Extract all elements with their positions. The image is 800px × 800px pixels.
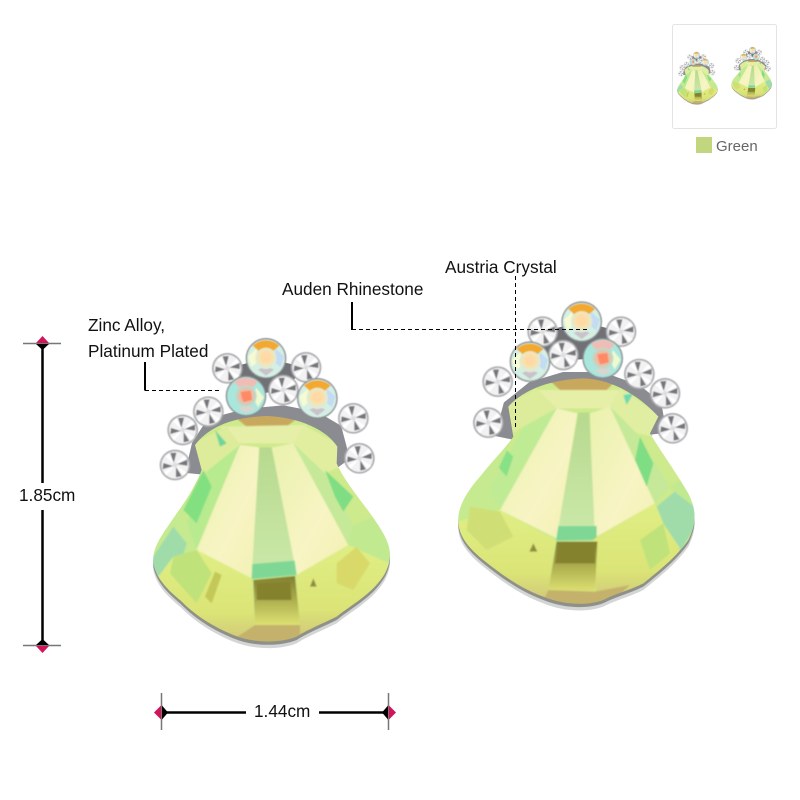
callout leader: [351, 302, 353, 330]
zinc alloy dashed leader: [145, 390, 222, 392]
thumbnail frame: [672, 24, 776, 128]
callout: austria crystal: Austria Crystal: [445, 257, 557, 277]
colour swatch: [696, 137, 712, 153]
callout text: Platinum Plated: [88, 341, 208, 361]
left earring: [140, 338, 400, 650]
height dimension: [19, 336, 75, 653]
austria crystal dashed leader: [514, 276, 516, 428]
callout: zinc alloy: [88, 315, 208, 390]
colour name: Green: [716, 138, 758, 155]
height label: 1.85cm: [19, 485, 75, 505]
dimension ticks: [162, 693, 388, 730]
thumbnail right earring: [730, 47, 774, 100]
thumbnail left earring: [675, 52, 719, 105]
left marker base: [162, 706, 168, 720]
dimension line: [163, 711, 387, 714]
right marker base: [382, 706, 388, 720]
callout leader: [144, 362, 146, 390]
top marker base: [36, 344, 49, 350]
dimension line: [41, 345, 44, 645]
callout text: Zinc Alloy,: [88, 315, 165, 335]
bottom marker base: [36, 639, 49, 645]
dimension ticks: [23, 344, 61, 646]
left marker: [154, 706, 161, 720]
width label: 1.44cm: [254, 701, 310, 721]
width dimension: [154, 693, 396, 730]
bottom marker: [36, 646, 49, 653]
right earring: [450, 301, 710, 613]
auden rhinestone dashed leader: [352, 328, 590, 330]
callout text: Auden Rhinestone: [282, 279, 423, 299]
panel: colour thumbnail: [672, 24, 776, 155]
right marker: [389, 706, 396, 720]
top marker: [36, 336, 49, 343]
